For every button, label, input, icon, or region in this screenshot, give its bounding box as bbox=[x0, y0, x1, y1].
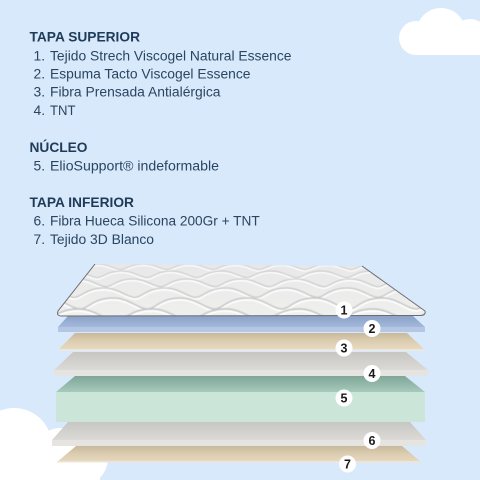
section: tapa inferior bbox=[30, 194, 260, 247]
badge 1: 1 bbox=[341, 304, 348, 318]
badge 5: 5 bbox=[341, 392, 348, 406]
cloud: bottom left bbox=[0, 408, 108, 480]
section: tapa superior bbox=[30, 28, 292, 118]
list: tapa superior items: Fibra Prensada Antialérgica bbox=[50, 84, 221, 100]
list: tapa inferior items bbox=[34, 212, 260, 247]
badge 7 bbox=[339, 456, 356, 472]
badge 5 bbox=[336, 390, 352, 406]
layer 4: TNT bbox=[54, 352, 428, 376]
list: tapa inferior items: Fibra Hueca Silicona 200Gr + TNT bbox=[50, 212, 260, 228]
list: tapa superior items: Espuma Tacto Viscogel Essence bbox=[50, 66, 251, 82]
layer 2: espuma bbox=[58, 316, 425, 332]
list: núcleo items: 5. bbox=[34, 158, 45, 174]
badge 7: 7 bbox=[344, 458, 351, 472]
list: tapa inferior items: 7. bbox=[34, 231, 45, 247]
list: tapa superior items: Tejido Strech Viscogel Natural Essence bbox=[50, 48, 292, 64]
badge 3 bbox=[336, 340, 352, 356]
badge 6 bbox=[364, 432, 380, 449]
cloud: top right bbox=[399, 8, 480, 58]
section: núcleo bbox=[30, 138, 219, 174]
heading: tapa inferior: TAPA INFERIOR bbox=[30, 194, 134, 210]
badge 2: 2 bbox=[369, 322, 376, 336]
layer 1: tejido superior bbox=[57, 264, 426, 316]
badge 3: 3 bbox=[341, 342, 348, 356]
badge 4 bbox=[364, 365, 380, 382]
list: tapa superior items: 4. bbox=[34, 102, 45, 118]
list: tapa inferior items: Tejido 3D Blanco bbox=[50, 231, 154, 247]
list: tapa superior items bbox=[34, 48, 292, 118]
list: tapa superior items: 3. bbox=[34, 84, 45, 100]
badge 1 bbox=[336, 302, 352, 318]
heading: núcleo: NÚCLEO bbox=[30, 138, 88, 155]
list: tapa inferior items: 6. bbox=[34, 212, 45, 228]
layer 7: tejido 3D bbox=[57, 446, 421, 462]
list: tapa superior items: 1. bbox=[34, 48, 45, 64]
list: tapa superior items: 2. bbox=[34, 66, 45, 82]
list: tapa superior items: TNT bbox=[50, 102, 76, 118]
layer 3: fibra prensada bbox=[59, 333, 424, 350]
heading: tapa superior: TAPA SUPERIOR bbox=[30, 28, 140, 44]
badge 6: 6 bbox=[369, 434, 376, 448]
list: núcleo items: ElioSupport® indeformable bbox=[50, 158, 219, 174]
badge 4: 4 bbox=[369, 367, 376, 381]
layer 5: núcleo bbox=[56, 376, 425, 422]
mattress layers diagram bbox=[52, 264, 428, 462]
badge 2 bbox=[364, 320, 380, 337]
layer 6: fibra hueca bbox=[52, 422, 426, 446]
